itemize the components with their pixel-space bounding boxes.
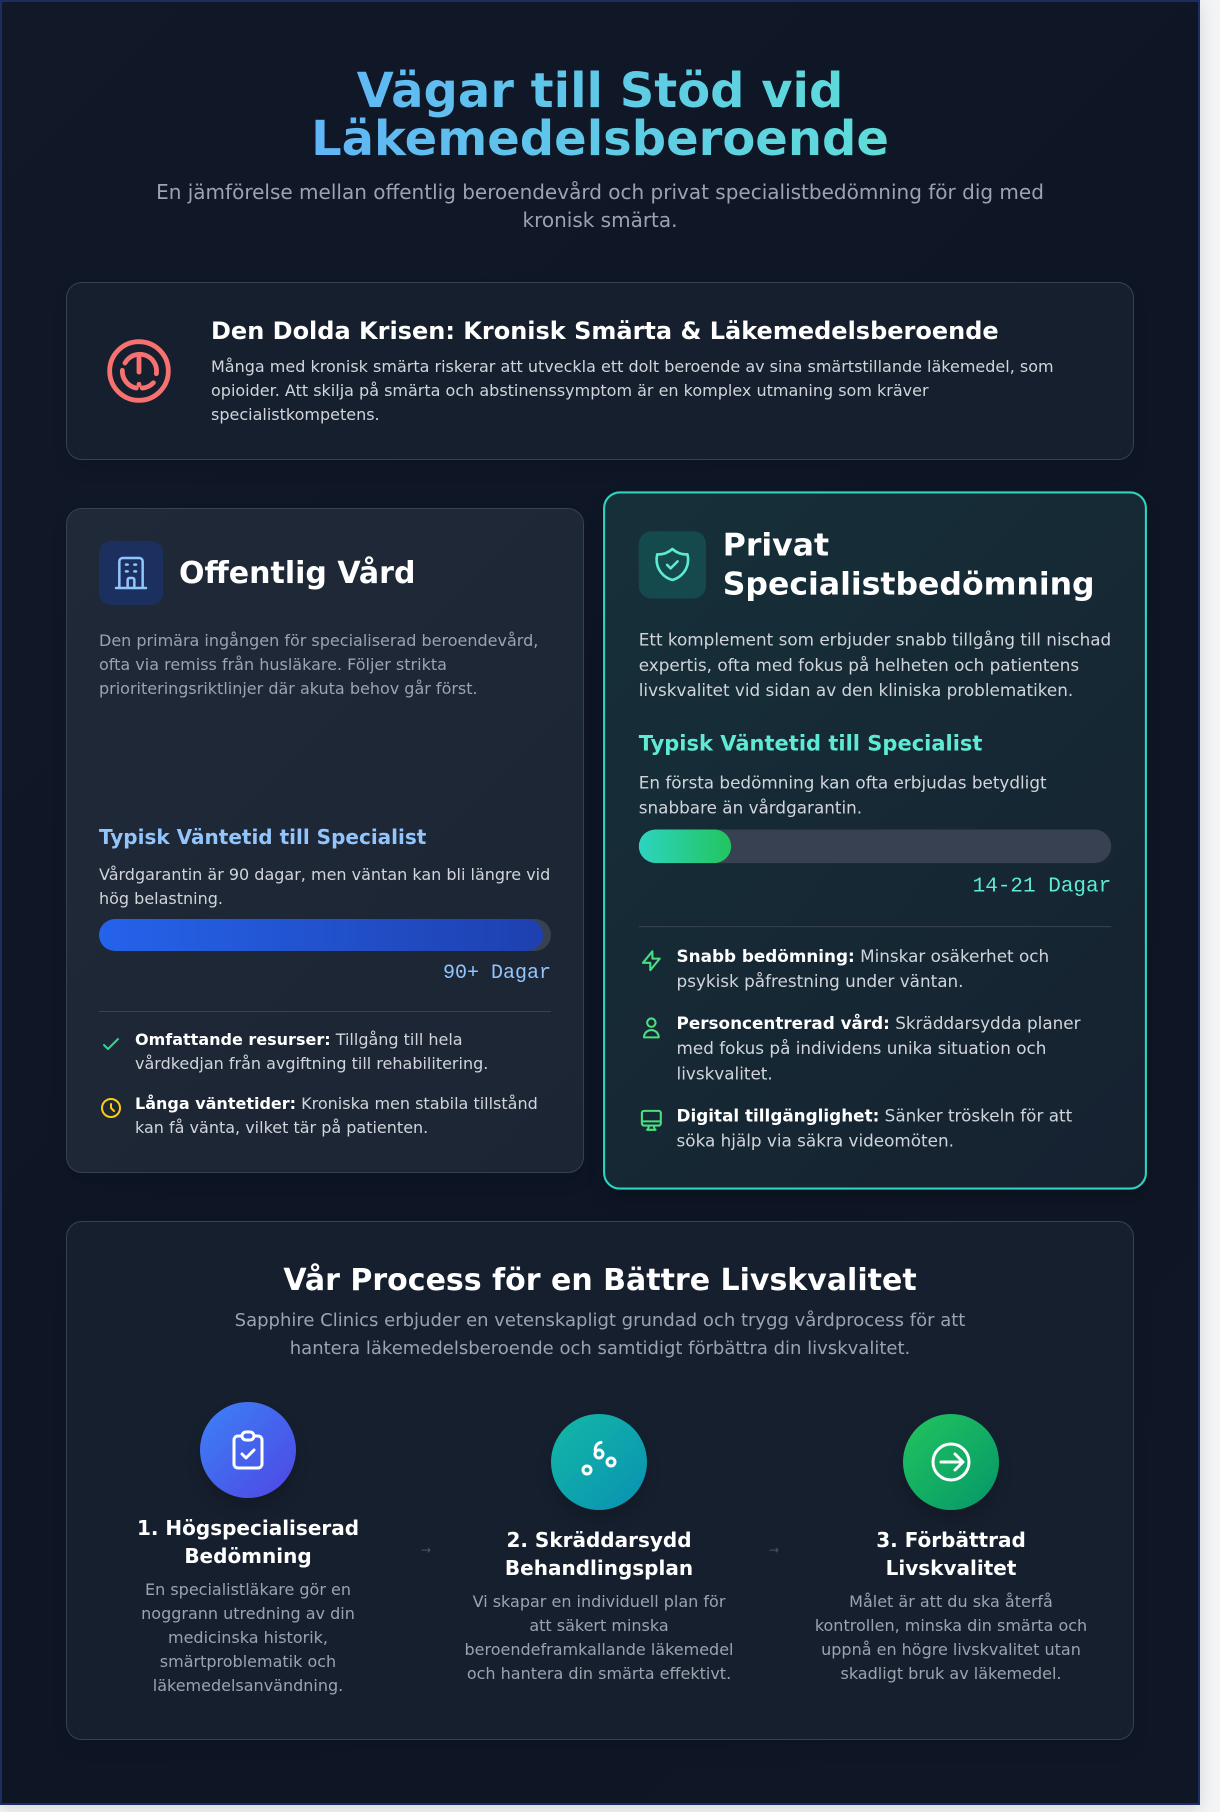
- step 3 heading: [876, 1528, 1026, 1580]
- subtitle: [156, 180, 1044, 232]
- step 2 heading: 2. Skräddarsydd: [506, 1528, 692, 1552]
- private heading: [723, 527, 1095, 602]
- private point: person: [642, 1013, 1081, 1084]
- private point: fast: psykisk påfrestning under väntan.: [677, 971, 963, 991]
- arrow 2 to 3: →: [769, 1543, 779, 1557]
- private point: person: livskvalitet.: [677, 1064, 773, 1084]
- comparison columns: [66, 491, 1147, 1190]
- public wait note: Vårdgarantin är 90 dagar, men väntan kan bli längre vid: [99, 865, 550, 884]
- private point: digital: [640, 1106, 1072, 1151]
- step 1 heading: Bedömning: [184, 1544, 312, 1568]
- public wait value: 90+ Dagar: [443, 962, 551, 985]
- public heading: Offentlig Vård: [179, 556, 415, 591]
- public description: Den primära ingången för specialiserad beroendevård,: [99, 631, 538, 650]
- step 3 text: uppnå en högre livskvalitet utan: [821, 1640, 1081, 1659]
- step 3 text: Målet är att du ska återfå: [849, 1592, 1053, 1611]
- private header: [638, 527, 1095, 602]
- private description: Ett komplement som erbjuder snabb tillgång till nischad: [639, 630, 1111, 650]
- step 2: [464, 1414, 733, 1683]
- step 1 heading: 1. Högspecialiserad: [137, 1516, 359, 1540]
- public description: [99, 631, 538, 698]
- step 1 text: En specialistläkare gör en: [145, 1580, 351, 1599]
- public header: [99, 541, 415, 605]
- private description: livskvalitet vid sidan av den kliniska problematiken.: [639, 680, 1073, 700]
- process steps: [137, 1402, 1087, 1695]
- private point: fast: Snabb bedömning: Minskar osäkerhet och: [677, 946, 1049, 966]
- private wait value: 14-21 Dagar: [973, 875, 1111, 899]
- header: [156, 63, 1044, 232]
- icon: shield check: [639, 531, 706, 598]
- subtitle: kronisk smärta.: [522, 208, 678, 232]
- step 2 text: Vi skapar en individuell plan för: [473, 1592, 725, 1611]
- private point: digital: Digital tillgänglighet: Sänker tröskeln för att: [677, 1106, 1072, 1126]
- private heading: Privat: [723, 527, 829, 564]
- private wait note: [639, 773, 1047, 818]
- title: Vägar till Stöd vid: [357, 63, 843, 119]
- panel: hidden crisis: [66, 282, 1134, 460]
- private wait heading: Typisk Väntetid till Specialist: [639, 731, 982, 756]
- public point: waiting: [101, 1094, 538, 1137]
- public description: ofta via remiss från husläkare. Följer strikta: [99, 655, 447, 674]
- icon: clipboard check: [200, 1402, 296, 1498]
- step 1 text: medicinska historik,: [168, 1628, 328, 1647]
- crisis body: [211, 357, 1054, 424]
- public point: resources: vårdkedjan från avgiftning till rehabilitering.: [135, 1054, 488, 1073]
- public point: waiting: Långa väntetider: Kroniska men stabila tillstånd: [135, 1094, 538, 1113]
- step 2 text: beroendeframkallande läkemedel: [464, 1640, 733, 1659]
- process lead: [235, 1310, 965, 1359]
- public wait bar: [99, 919, 551, 951]
- panel: public care: [66, 508, 584, 1173]
- icon: pain circle: [107, 339, 171, 403]
- private point: person: med fokus på individens unika situation och: [677, 1038, 1046, 1058]
- public wait note: [99, 865, 550, 908]
- private list: [639, 926, 1111, 1154]
- icon: treatment nodes: [551, 1414, 647, 1510]
- icon: hospital building: [99, 541, 163, 605]
- public wait heading: Typisk Väntetid till Specialist: [99, 825, 426, 849]
- private point: fast: [642, 946, 1049, 991]
- process lead: Sapphire Clinics erbjuder en vetenskapligt grundad och trygg vårdprocess för att: [235, 1310, 965, 1331]
- step 2 heading: [505, 1528, 693, 1580]
- subtitle: En jämförelse mellan offentlig beroendevård och privat specialistbedömning för dig med: [156, 180, 1044, 204]
- private description: [639, 630, 1111, 700]
- crisis body: specialistkompetens.: [211, 405, 380, 424]
- icon: arrow circle: [903, 1414, 999, 1510]
- public point: waiting: kan få vänta, vilket tär på patienten.: [135, 1118, 428, 1137]
- step 1 heading: [137, 1516, 359, 1568]
- step 3 heading: 3. Förbättrad: [876, 1528, 1026, 1552]
- crisis body: Många med kronisk smärta riskerar att utveckla ett dolt beroende av sina smärtstillande läkemedel, som: [211, 357, 1054, 376]
- step 3: [815, 1414, 1087, 1683]
- arrow 1 to 2: →: [421, 1543, 431, 1557]
- panel: private assessment: [603, 491, 1147, 1190]
- private wait note: snabbare än vårdgarantin.: [639, 798, 862, 818]
- private heading: Specialistbedömning: [723, 565, 1095, 602]
- private point: person: Personcentrerad vård: Skräddarsydda planer: [677, 1013, 1081, 1033]
- step 2 text: [464, 1592, 733, 1683]
- step 2 text: att säkert minska: [529, 1616, 669, 1635]
- step 1 text: [141, 1580, 355, 1695]
- crisis heading: Den Dolda Krisen: Kronisk Smärta & Läkemedelsberoende: [211, 317, 999, 345]
- step 1: [137, 1402, 359, 1695]
- private wait bar: [639, 829, 1111, 863]
- public point: resources: Omfattande resurser: Tillgång till hela: [135, 1030, 463, 1049]
- private point: digital: söka hjälp via säkra videomöten.: [677, 1131, 954, 1151]
- public list: [99, 1011, 551, 1140]
- public description: prioriteringsriktlinjer där akuta behov går först.: [99, 679, 478, 698]
- step 3 text: skadligt bruk av läkemedel.: [840, 1664, 1062, 1683]
- public wait note: hög belastning.: [99, 889, 223, 908]
- step 1 text: smärtproblematik och: [160, 1652, 336, 1671]
- process lead: hantera läkemedelsberoende och samtidigt förbättra din livskvalitet.: [290, 1338, 910, 1359]
- crisis text: [211, 317, 1054, 424]
- step 2 text: och hantera din smärta effektivt.: [467, 1664, 731, 1683]
- step 1 text: noggrann utredning av din: [141, 1604, 355, 1623]
- step 3 text: kontrollen, minska din smärta och: [815, 1616, 1087, 1635]
- process heading: Vår Process för en Bättre Livskvalitet: [283, 1263, 917, 1298]
- private description: expertis, ofta med fokus på helheten och patientens: [639, 655, 1079, 675]
- private wait note: En första bedömning kan ofta erbjudas betydligt: [639, 773, 1047, 793]
- step 3 text: [815, 1592, 1087, 1683]
- step 1 text: läkemedelsanvändning.: [153, 1676, 343, 1695]
- panel: process: [66, 1221, 1134, 1740]
- title: [311, 67, 889, 163]
- public point: resources: [103, 1030, 488, 1073]
- title: Läkemedelsberoende: [311, 111, 889, 167]
- step 2 heading: Behandlingsplan: [505, 1556, 693, 1580]
- crisis body: opioider. Att skilja på smärta och abstinenssymptom är en komplex utmaning som kräver: [211, 381, 929, 400]
- step 3 heading: Livskvalitet: [886, 1556, 1016, 1580]
